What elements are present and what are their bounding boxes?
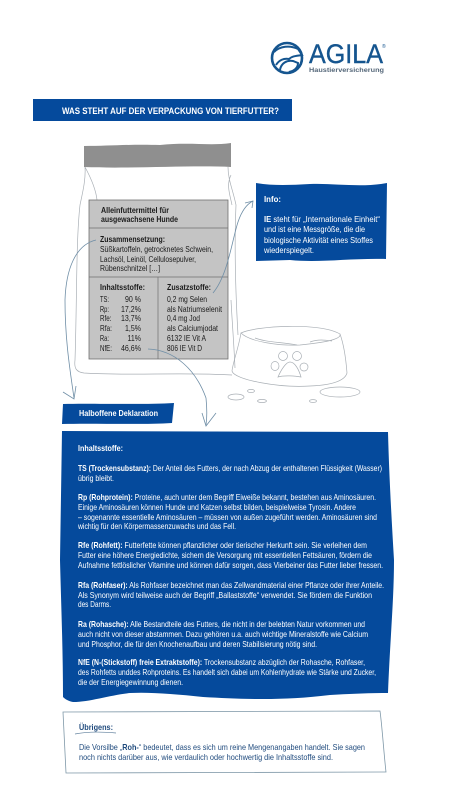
text: NfE: NfE (N-(Stickstoff) freie Extraktstoffe): Trockensubstanz abzüglich der Rohasche, Rohfaser, [78, 657, 365, 667]
brand name: AGILA [309, 39, 383, 69]
text: Rfa: Rfa (Rohfaser): Als Rohfaser bezeichnet man das Zellwandmaterial einer Pflanze oder ihrer Anteile. [78, 580, 384, 590]
label: ingredients table [100, 282, 145, 353]
label: ingredients table: 17,2% [121, 304, 141, 314]
label: ingredients table: 1,5% [125, 323, 141, 333]
subheading: Inhaltsstoffe: [78, 443, 123, 453]
arrow: additives to info [213, 201, 253, 293]
label: ingredients table: NfE: [100, 343, 112, 353]
text: Rp: – sogenannte essentielle Aminosäuren – müssen von außen zugeführt werden. Aminosäuren sind [78, 512, 377, 522]
text: NfE [78, 657, 376, 687]
info heading: Info: [264, 194, 281, 204]
illustration: food bag outline [75, 143, 238, 375]
callout text: noch nichts darüber aus, wie verdaulich oder hochwertig die Inhaltsstoffe sind. [79, 752, 333, 762]
info text: biologische Aktivität eines Stoffes [264, 235, 373, 245]
text: Rp: Rp (Rohprotein): Proteine, auch unter dem Begriff Eiweiße bekannt, bestehen aus Aminosäuren. [78, 492, 376, 502]
title bar [33, 99, 292, 121]
label: additives: 6132 IE Vit A [167, 333, 206, 343]
label: additives: 806 IE Vit D [167, 343, 202, 353]
title: WAS STEHT AUF DER VERPACKUNG VON TIERFUTTER? [62, 105, 279, 116]
label: composition: Lachsöl, Leinöl, Cellulosepulver, [100, 254, 196, 264]
callout text: Die Vorsilbe „Roh-“ bedeutet, dass es sich um reine Mengenangaben handelt. Sie sagen [79, 742, 365, 752]
label: additives: 0,4 mg Jod [167, 313, 200, 323]
label: ingredients table: Rfa: [100, 323, 112, 333]
spilled crumbs [228, 387, 360, 403]
text: Rfa: Als Synonym wird teilweise auch der Begriff „Ballaststoffe“ verwendet. Sie fördern die Funktion [78, 590, 372, 600]
label: ingredients table: 13,7% [121, 313, 141, 323]
text: Rfa [78, 580, 384, 609]
text: Rfe: Rfe (Rohfett): Futterfette können pflanzlicher oder tierischer Herkunft sein. Sie verleihen dem [78, 540, 367, 550]
label: additives: Zusatzstoffe: [167, 282, 211, 292]
label: ingredients table: 11% [128, 333, 141, 343]
label: ingredients table: Ra: [100, 333, 109, 343]
label: additives [167, 282, 222, 353]
text: TS: TS (Trockensubstanz): Der Anteil des Futters, der nach Abzug der enthaltenen Flüssigkeit (Wasser) [78, 463, 382, 473]
arrow: NfE to explanation [148, 349, 216, 426]
text: Rfe: Futter eine höhere Energiedichte, sichern die Versorgung mit essentiellen Fettsäuren, fördern die [78, 550, 372, 560]
label: additives: 0,2 mg Selen [167, 294, 207, 304]
text: NfE: des Rohfetts unddes Rohproteins. Es handelt sich dabei um Kohlenhydrate wie Stärke und Zucker, [78, 667, 376, 677]
label: ingredients table: 90 % [125, 294, 141, 304]
tagline: Haustierversicherung [309, 67, 384, 74]
text: Rp: Einige Aminosäuren können Hunde und Katzen selbst bilden, beispielweise Tyrosin. Andere [78, 502, 356, 512]
panel: info box [256, 183, 387, 261]
icon: dog and cat in circle [272, 43, 302, 73]
text: Rfe: Aufnahme fettlöslicher Vitamine und können dafür sorgen, dass Vierbeiner das Futter lieber fressen. [78, 560, 383, 570]
text: TS [78, 463, 382, 483]
label: ingredients table: Rp: [100, 304, 109, 314]
label: product type: ausgewachsene Hunde [101, 214, 178, 224]
logo: AGILA [272, 39, 386, 74]
icon: food bowl with paw [228, 326, 360, 403]
text: Rp [77, 492, 377, 531]
label: composition: Süßkartoffeln, getrocknetes Schwein, [100, 244, 213, 254]
text: Ra [78, 619, 368, 649]
label: ingredients table: 46,6% [121, 343, 141, 353]
text: Rfa: des Darms. [78, 599, 111, 609]
panel: ingredient explanations [60, 431, 394, 702]
paw print [271, 352, 308, 377]
info text: IE steht für „Internationale Einheit“ [264, 214, 380, 224]
text: Rfe [78, 540, 383, 570]
heading: half-open declaration: Halboffene Deklaration [79, 408, 158, 418]
label: ingredients table: Rfe: [100, 313, 112, 323]
registered mark: ® [382, 43, 386, 50]
callout text [79, 742, 365, 762]
label: composition: Zusammensetzung: [100, 234, 165, 244]
text: Ra: auch nicht von dieser abstammen. Dazu gehören u.a. auch wichtige Mineralstoffe wie Calcium [78, 629, 368, 639]
callout: by the way [63, 711, 386, 773]
label: composition [100, 234, 213, 273]
info text [263, 214, 380, 255]
text: Ra: und Phosphor, die für den Knochenaufbau und deren Stabilisierung nötig sind. [78, 639, 317, 649]
label: composition: Rübenschnitzel […] [100, 263, 160, 273]
info text: und ist eine Messgröße, die die [264, 224, 365, 234]
text: TS: übrig bleibt. [78, 473, 114, 483]
arrow: composition to declaration [63, 240, 96, 399]
label: additives: als Natriumselenit [167, 304, 222, 314]
text: Ra: Ra (Rohasche): Alle Bestandteile des Futters, die nicht in der belebten Natur vorkommen und [78, 619, 365, 629]
heading: half-open declaration [62, 403, 174, 424]
label: ingredients table: Inhaltsstoffe: [100, 282, 145, 292]
text: Rp: wichtig für den Körpermassenzuwachs und das Fell. [77, 521, 236, 531]
label: product name: Alleinfuttermittel für [101, 205, 170, 215]
label: additives: als Calciumjodat [167, 323, 218, 333]
label: ingredients table: TS: [100, 294, 109, 304]
callout heading: Übrigens: [79, 722, 113, 732]
text: NfE: die der Energiegewinnung dienen. [78, 677, 183, 687]
info text: wiederspiegelt. [263, 245, 314, 255]
panel: product label [89, 200, 228, 359]
